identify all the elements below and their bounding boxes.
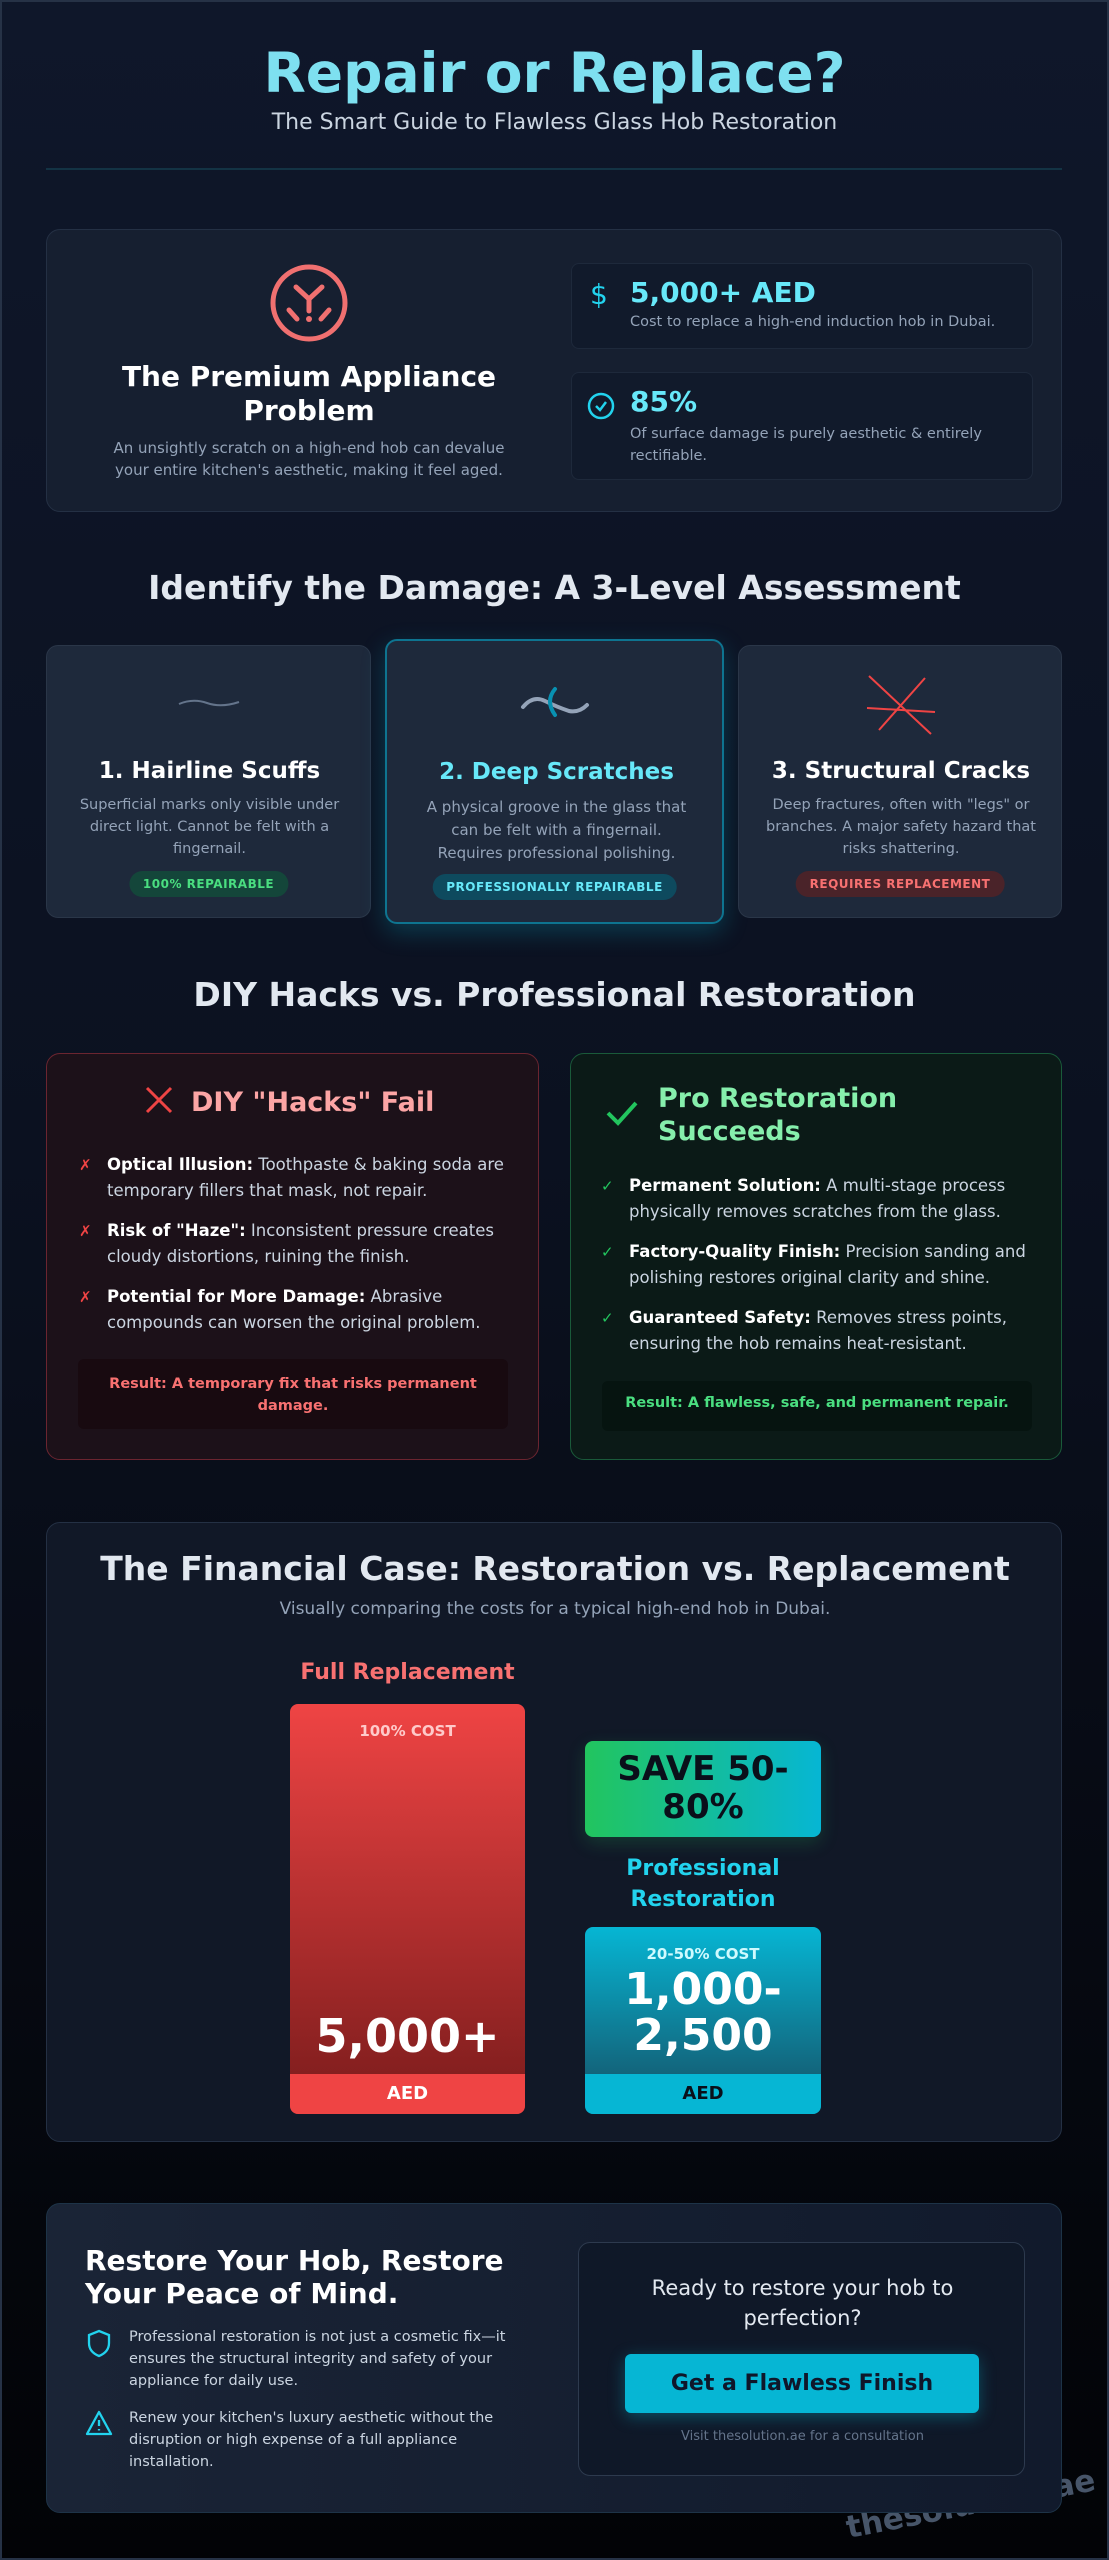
CTA box (578, 2242, 1025, 2476)
bar: restoration: AED (682, 2083, 724, 2104)
DIY result: Result: A temporary fix that risks permanent damage. (109, 1376, 477, 1414)
panel: DIY hacks fail: ✗ (79, 1222, 92, 1240)
icon: shield (88, 2330, 110, 2358)
heading: DIY vs pro: DIY Hacks vs. Professional Restoration (193, 975, 916, 1014)
card: structural cracks: REQUIRES REPLACEMENT (810, 877, 990, 891)
panel: DIY hacks fail: Risk of "Haze": Inconsistent pressure creates cloudy distortions, ruining the finish. (107, 1221, 494, 1266)
panel: pro restoration: ✓ (601, 1243, 614, 1261)
bar: full replacement: Full Replacement (300, 1660, 515, 1685)
stat: 85%: Of surface damage is purely aesthetic & entirely rectifiable. (630, 426, 982, 464)
panel: CTA: Professional restoration is not just a cosmetic fix—it ensures the structural integrity and safety of your appliance for daily use. (129, 2329, 505, 2389)
stat: cost: Cost to replace a high-end induction hob in Dubai. (630, 314, 995, 330)
callout: save (585, 1741, 821, 1837)
DIY title: DIY "Hacks" Fail (191, 1087, 434, 1118)
panel: DIY hacks fail: ✗ (79, 1288, 92, 1306)
stat: cost (571, 263, 1033, 349)
panel: DIY hacks fail: ✗ (79, 1156, 92, 1174)
panel: pro restoration: Succeeds (658, 1116, 801, 1147)
card: structural cracks: Deep fractures, often with "legs" or branches. A major safety hazard that risks shattering. (766, 797, 1036, 857)
panel: pro restoration: ✓ (601, 1309, 614, 1327)
panel: pro restoration: Factory-Quality Finish: Precision sanding and polishing restores original clarity and shine. (629, 1242, 1026, 1287)
stat: cost: 5,000+ AED (630, 276, 816, 309)
CTA box: Ready to restore your hob to perfection? (652, 2276, 953, 2330)
bar: full replacement: 100% COST (359, 1722, 456, 1740)
title: Repair or Replace? (263, 41, 846, 105)
bar: restoration: 1,000- (624, 1964, 782, 2015)
button (625, 2354, 979, 2413)
subtitle: The Smart Guide to Flawless Glass Hob Restoration (272, 110, 837, 135)
panel: pro restoration: Pro Restoration (658, 1083, 897, 1114)
stat: 85% (571, 372, 1033, 480)
card: structural cracks (738, 645, 1062, 918)
pro result: Result: A flawless, safe, and permanent repair. (625, 1395, 1009, 1411)
panel: CTA: Renew your kitchen's luxury aesthetic without the disruption or high expense of a full appliance installation. (129, 2410, 493, 2470)
card: deep scratches: 2. Deep Scratches (439, 759, 674, 785)
CTA box: Visit thesolution.ae for a consultation (681, 2429, 924, 2444)
DIY result (78, 1359, 508, 1429)
bar: full replacement: 5,000+ (315, 2009, 500, 2063)
card: hairline scuffs: 100% REPAIRABLE (143, 877, 274, 891)
CTA heading: Restore Your Hob, Restore Your Peace of Mind. (85, 2244, 504, 2310)
panel: pro restoration: Guaranteed Safety: Removes stress points, ensuring the hob remains heat-resistant. (629, 1308, 1007, 1353)
card: hairline scuffs: 1. Hairline Scuffs (99, 758, 320, 784)
button: Get a Flawless Finish (671, 2371, 933, 2396)
card: hairline scuffs (46, 645, 371, 918)
callout: save: 80% (662, 1787, 744, 1827)
pro result (602, 1381, 1032, 1431)
stat: cost: $ (590, 278, 608, 311)
panel: pro restoration: ✓ (601, 1177, 614, 1195)
text: An unsightly scratch on a high-end hob can devalue your entire kitchen's aesthetic, making it feel aged. (113, 439, 505, 479)
bar: full replacement (290, 1660, 525, 2114)
pro title (606, 1102, 638, 1126)
panel: financial case: Visually comparing the costs for a typical high-end hob in Dubai. (280, 1599, 830, 1619)
bar: restoration: 2,500 (633, 2010, 773, 2061)
panel: DIY hacks fail: Optical Illusion: Toothpaste & baking soda are temporary fillers that mask, not repair. (107, 1155, 504, 1200)
card: deep scratches: A physical groove in the glass that can be felt with a fingernail. Requires professional polishing. (427, 798, 686, 862)
bar: restoration: 20-50% COST (646, 1945, 760, 1963)
heading: identify damage: Identify the Damage: A 3-Level Assessment (148, 568, 961, 607)
financial title: The Financial Case: Restoration vs. Replacement (100, 1549, 1010, 1588)
card: deep scratches: PROFESSIONALLY REPAIRABLE (446, 880, 663, 894)
panel: premium appliance problem (46, 229, 1062, 512)
card: hairline scuffs: Superficial marks only visible under direct light. Cannot be felt with a fingernail. (80, 797, 339, 857)
heading: The Premium Appliance Problem (122, 360, 496, 427)
callout: save: SAVE 50- (617, 1749, 789, 1789)
label: professional restoration: Professional Restoration (626, 1856, 780, 1912)
panel: financial case (46, 1522, 1062, 2142)
bar: full replacement: AED (387, 2083, 428, 2104)
icon: broken hob (270, 264, 348, 342)
panel: pro restoration: Permanent Solution: A multi-stage process physically removes scratches from the glass. (629, 1176, 1005, 1221)
card: deep scratches (385, 639, 724, 924)
stat: 85%: 85% (630, 385, 697, 418)
panel: pro restoration (570, 1053, 1062, 1460)
card: structural cracks: 3. Structural Cracks (772, 758, 1030, 784)
panel: DIY hacks fail (46, 1053, 539, 1460)
icon: warning (86, 2410, 112, 2436)
panel: DIY hacks fail: Potential for More Damage: Abrasive compounds can worsen the original problem. (107, 1287, 481, 1332)
watermark: thesolution.ae (843, 2462, 1098, 2546)
panel: CTA (46, 2203, 1062, 2513)
bar: restoration (585, 1927, 821, 2114)
